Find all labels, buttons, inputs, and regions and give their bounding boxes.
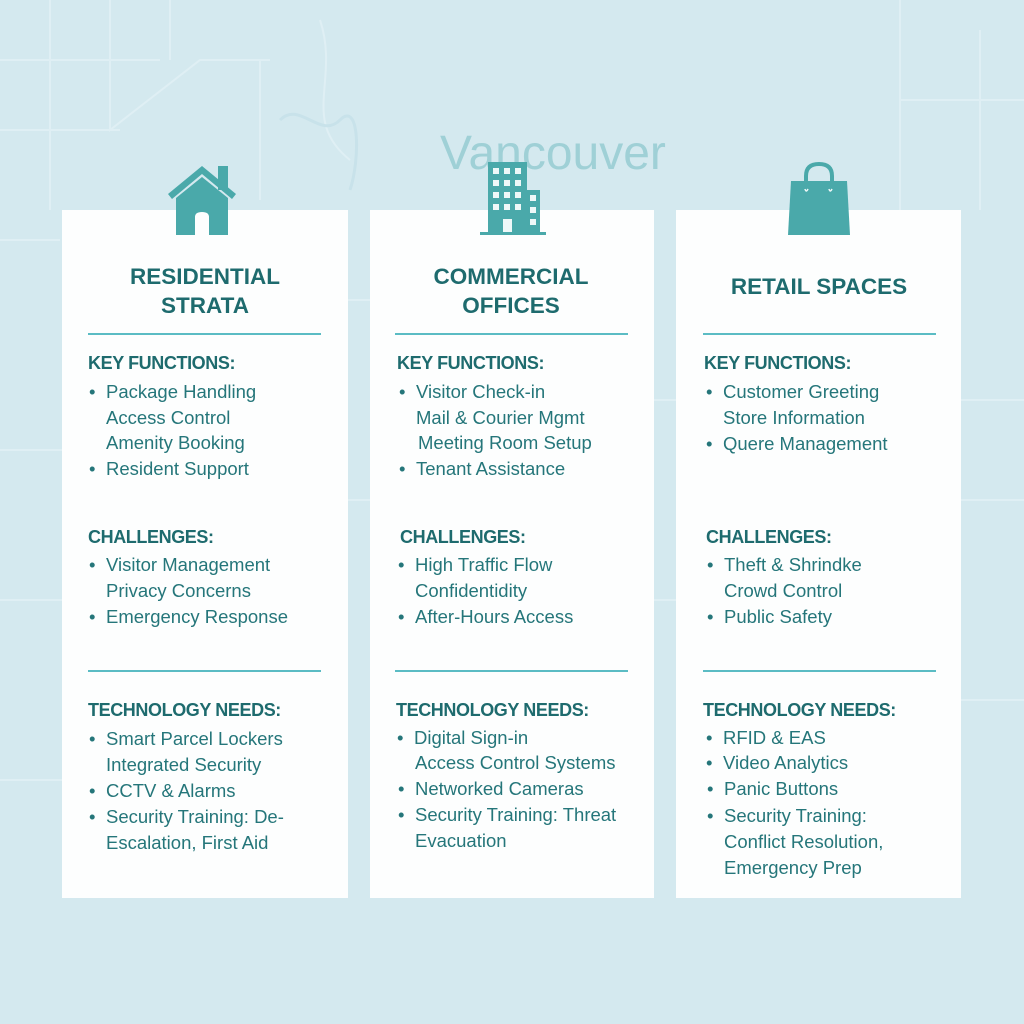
- challenges: [706, 527, 862, 627]
- card title: OFFICES: [462, 293, 560, 318]
- key functions: KEY FUNCTIONS:: [704, 353, 851, 373]
- technology needs: Security Training: Threat: [415, 804, 616, 825]
- icon: shopping bag: [788, 162, 850, 235]
- technology needs: Integrated Security: [106, 754, 261, 775]
- card title: [434, 264, 588, 318]
- key functions: •: [399, 381, 405, 402]
- key functions: Quere Management: [723, 433, 888, 454]
- key functions: Access Control: [106, 407, 230, 428]
- technology needs: Security Training: De-: [106, 806, 284, 827]
- technology needs: Evacuation: [415, 830, 507, 851]
- technology needs: •: [707, 778, 713, 799]
- challenges: CHALLENGES:: [400, 527, 526, 547]
- key functions: Visitor Check-in: [416, 381, 545, 402]
- challenges: Visitor Management: [106, 554, 270, 575]
- heading: Vancouver: Vancouver: [440, 127, 666, 180]
- challenges: Public Safety: [724, 606, 832, 627]
- technology needs: RFID & EAS: [723, 727, 826, 748]
- technology needs: •: [398, 778, 404, 799]
- key functions: Resident Support: [106, 458, 249, 479]
- card title: RETAIL SPACES: [731, 274, 907, 299]
- key functions: KEY FUNCTIONS:: [88, 353, 235, 373]
- technology needs: TECHNOLOGY NEEDS:: [703, 700, 896, 720]
- icon: house: [168, 166, 236, 235]
- technology needs: [88, 700, 284, 853]
- key functions: Meeting Room Setup: [418, 432, 592, 453]
- key functions: Mail & Courier Mgmt: [416, 407, 585, 428]
- key functions: •: [89, 458, 95, 479]
- technology needs: Networked Cameras: [415, 778, 584, 799]
- key functions: Store Information: [723, 407, 865, 428]
- challenges: [88, 527, 288, 627]
- technology needs: •: [707, 805, 713, 826]
- challenges: High Traffic Flow: [415, 554, 552, 575]
- technology needs: TECHNOLOGY NEEDS:: [396, 700, 589, 720]
- panel: residential strata: [62, 210, 348, 898]
- challenges: CHALLENGES:: [88, 527, 214, 547]
- challenges: After-Hours Access: [415, 606, 573, 627]
- technology needs: •: [89, 806, 95, 827]
- technology needs: Digital Sign-in: [414, 727, 528, 748]
- technology needs: CCTV & Alarms: [106, 780, 236, 801]
- technology needs: Panic Buttons: [724, 778, 838, 799]
- technology needs: Access Control Systems: [415, 752, 615, 773]
- card title: [130, 264, 280, 318]
- key functions: Tenant Assistance: [416, 458, 565, 479]
- technology needs: •: [398, 804, 404, 825]
- challenges: •: [707, 554, 713, 575]
- challenges: Confidentidity: [415, 580, 527, 601]
- key functions: Amenity Booking: [106, 432, 245, 453]
- technology needs: •: [89, 780, 95, 801]
- challenges: •: [398, 606, 404, 627]
- card title: COMMERCIAL: [434, 264, 588, 289]
- technology needs: Conflict Resolution,: [724, 831, 883, 852]
- technology needs: [703, 700, 896, 878]
- technology needs: •: [706, 752, 712, 773]
- challenges: [398, 527, 573, 627]
- challenges: Theft & Shrindke: [724, 554, 862, 575]
- icon: office building: [480, 162, 546, 235]
- key functions: [397, 353, 592, 479]
- key functions: •: [89, 381, 95, 402]
- key functions: KEY FUNCTIONS:: [397, 353, 544, 373]
- technology needs: Smart Parcel Lockers: [106, 728, 283, 749]
- challenges: •: [707, 606, 713, 627]
- key functions: [704, 353, 888, 454]
- technology needs: •: [706, 727, 712, 748]
- key functions: •: [706, 433, 712, 454]
- challenges: •: [398, 554, 404, 575]
- technology needs: [396, 700, 616, 851]
- technology needs: Emergency Prep: [724, 857, 862, 878]
- technology needs: Video Analytics: [723, 752, 848, 773]
- technology needs: •: [397, 727, 403, 748]
- card title: STRATA: [161, 293, 249, 318]
- technology needs: •: [89, 728, 95, 749]
- panel: commercial offices: [370, 210, 654, 898]
- technology needs: Security Training:: [724, 805, 867, 826]
- challenges: Emergency Response: [106, 606, 288, 627]
- challenges: •: [89, 554, 95, 575]
- challenges: Crowd Control: [724, 580, 842, 601]
- key functions: •: [706, 381, 712, 402]
- challenges: CHALLENGES:: [706, 527, 832, 547]
- panel: retail spaces: [676, 210, 961, 898]
- key functions: Package Handling: [106, 381, 256, 402]
- card title: RESIDENTIAL: [130, 264, 280, 289]
- key functions: •: [399, 458, 405, 479]
- technology needs: TECHNOLOGY NEEDS:: [88, 700, 281, 720]
- challenges: Privacy Concerns: [106, 580, 251, 601]
- challenges: •: [89, 606, 95, 627]
- technology needs: Escalation, First Aid: [106, 832, 268, 853]
- key functions: Customer Greeting: [723, 381, 879, 402]
- key functions: [88, 353, 256, 479]
